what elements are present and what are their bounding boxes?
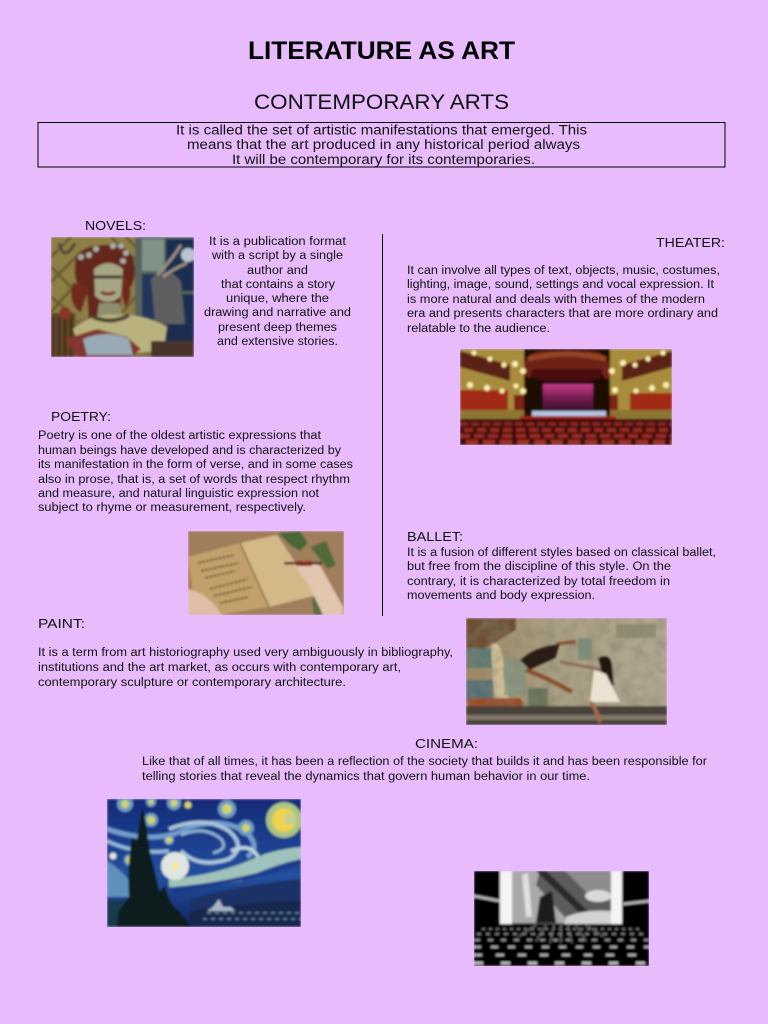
- intro text box: It is called the set of artistic manifestations that emerged. This: [176, 122, 587, 138]
- text block: theater description: era and presents characters that are more ordinary and: [407, 308, 718, 320]
- heading: ballet: BALLET:: [407, 529, 463, 544]
- image: two dancers in front of a weathered wall: [466, 618, 667, 725]
- panel: theater: [407, 235, 725, 445]
- heading: novels: NOVELS:: [85, 218, 146, 233]
- text block: ballet description: It is a fusion of different styles based on classical ballet,: [407, 547, 716, 559]
- text block: novels description: with a script by a single: [211, 250, 343, 262]
- heading: theater: THEATER:: [656, 235, 725, 250]
- text block: paint description: institutions and the art market, as occurs with contemporary art,: [38, 662, 401, 674]
- text block: paint description: contemporary sculpture or contemporary architecture.: [38, 677, 346, 689]
- intro text box: It will be contemporary for its contemporaries.: [232, 152, 535, 167]
- text block: theater description: [407, 265, 720, 335]
- text block: poetry description: [38, 430, 353, 514]
- title: LITERATURE AS ART: [248, 37, 515, 65]
- text block: novels description: It is a publication format: [209, 236, 347, 248]
- panel: cinema: [142, 736, 707, 966]
- text block: poetry description: subject to rhyme or measurement, respectively.: [38, 502, 306, 514]
- text block: novels description: [204, 236, 351, 348]
- text block: theater description: lighting, image, sound, settings and vocal expression. It: [407, 279, 715, 291]
- text block: cinema description: Like that of all times, it has been a reflection of the society that builds it and has been responsible for: [142, 756, 707, 768]
- text block: ballet description: but free from the discipline of this style. On the: [407, 561, 671, 573]
- text block: paint description: It is a term from art historiography used very ambiguously in bibliography,: [38, 647, 453, 659]
- panel: poetry: [38, 409, 353, 615]
- text block: ballet description: movements and body expression.: [407, 590, 595, 602]
- text block: cinema description: [142, 756, 707, 783]
- text block: ballet description: [407, 547, 716, 602]
- text block: poetry description: also in prose, that is, a set of words that respect rhythm: [38, 474, 350, 486]
- heading: poetry: POETRY:: [51, 409, 111, 424]
- image: theater auditorium and stage: [460, 349, 672, 445]
- text block: poetry description: Poetry is one of the oldest artistic expressions that: [38, 430, 322, 442]
- intro text box: [38, 122, 725, 167]
- heading: paint: PAINT:: [38, 616, 85, 631]
- text block: poetry description: its manifestation in the form of verse, and in some cases: [38, 459, 353, 471]
- text block: theater description: relatable to the audience.: [407, 323, 550, 335]
- image: portrait painting of a woman with a goat: [51, 237, 194, 357]
- text block: novels description: drawing and narrative and: [204, 307, 351, 319]
- text block: paint description: [38, 647, 453, 689]
- text block: ballet description: contrary, it is characterized by total freedom in: [407, 576, 670, 588]
- text block: novels description: and extensive stories.: [217, 336, 338, 348]
- text block: cinema description: telling stories that reveal the dynamics that govern human behavior in our time.: [142, 771, 590, 783]
- text block: theater description: is more natural and deals with themes of the modern: [407, 294, 705, 306]
- text block: novels description: unique, where the: [226, 293, 329, 305]
- panel: paint: [38, 616, 453, 927]
- panel: novels: [51, 218, 351, 357]
- heading: cinema: CINEMA:: [415, 736, 478, 751]
- subtitle: CONTEMPORARY ARTS: [254, 90, 509, 114]
- intro text box: means that the art produced in any historical period always: [187, 137, 580, 152]
- image: black and white cinema screen and seats: [474, 871, 649, 966]
- panel: ballet: [407, 529, 716, 725]
- image: open book with a hand writing: [188, 531, 344, 615]
- text block: novels description: author and: [247, 265, 308, 277]
- image: starry night painting: [107, 799, 301, 927]
- text block: theater description: It can involve all types of text, objects, music, costumes,: [407, 265, 720, 277]
- text block: poetry description: and measure, and natural linguistic expression not: [38, 488, 320, 500]
- column divider: [382, 234, 384, 616]
- text block: novels description: present deep themes: [218, 322, 337, 334]
- text block: poetry description: human beings have developed and is characterized by: [38, 445, 341, 457]
- text block: novels description: that contains a story: [221, 279, 335, 291]
